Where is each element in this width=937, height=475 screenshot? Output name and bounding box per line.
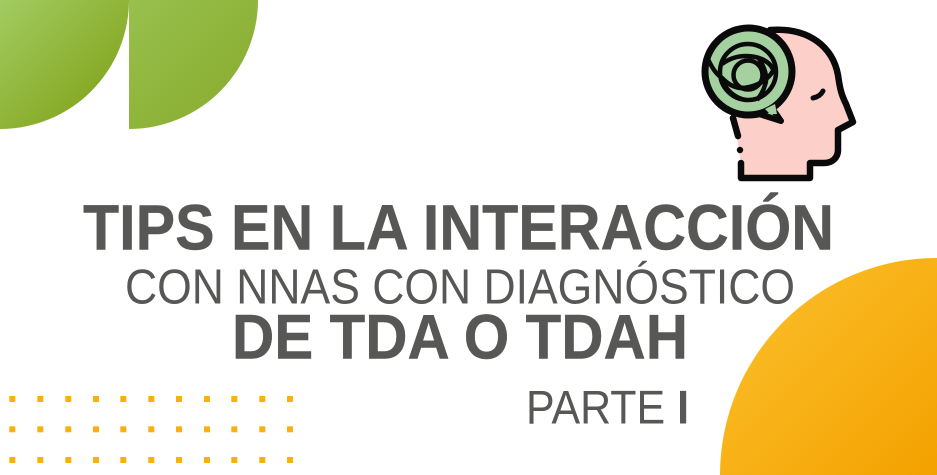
green quarter circle right: [129, 0, 258, 129]
title line 1: TIPS EN LA INTERACCIÓN: [83, 192, 834, 264]
subtitle: parte I: PARTE I: [526, 382, 689, 434]
decorative dot grid: [9, 396, 293, 463]
title line 2: CON NNAS CON DIAGNÓSTICO: [125, 260, 795, 314]
icon: head with tangled thought bubble: [705, 28, 853, 178]
orange quarter circle: [720, 258, 937, 475]
title line 3: DE TDA O TDAH: [232, 302, 688, 372]
green quarter circle left: [0, 0, 129, 129]
